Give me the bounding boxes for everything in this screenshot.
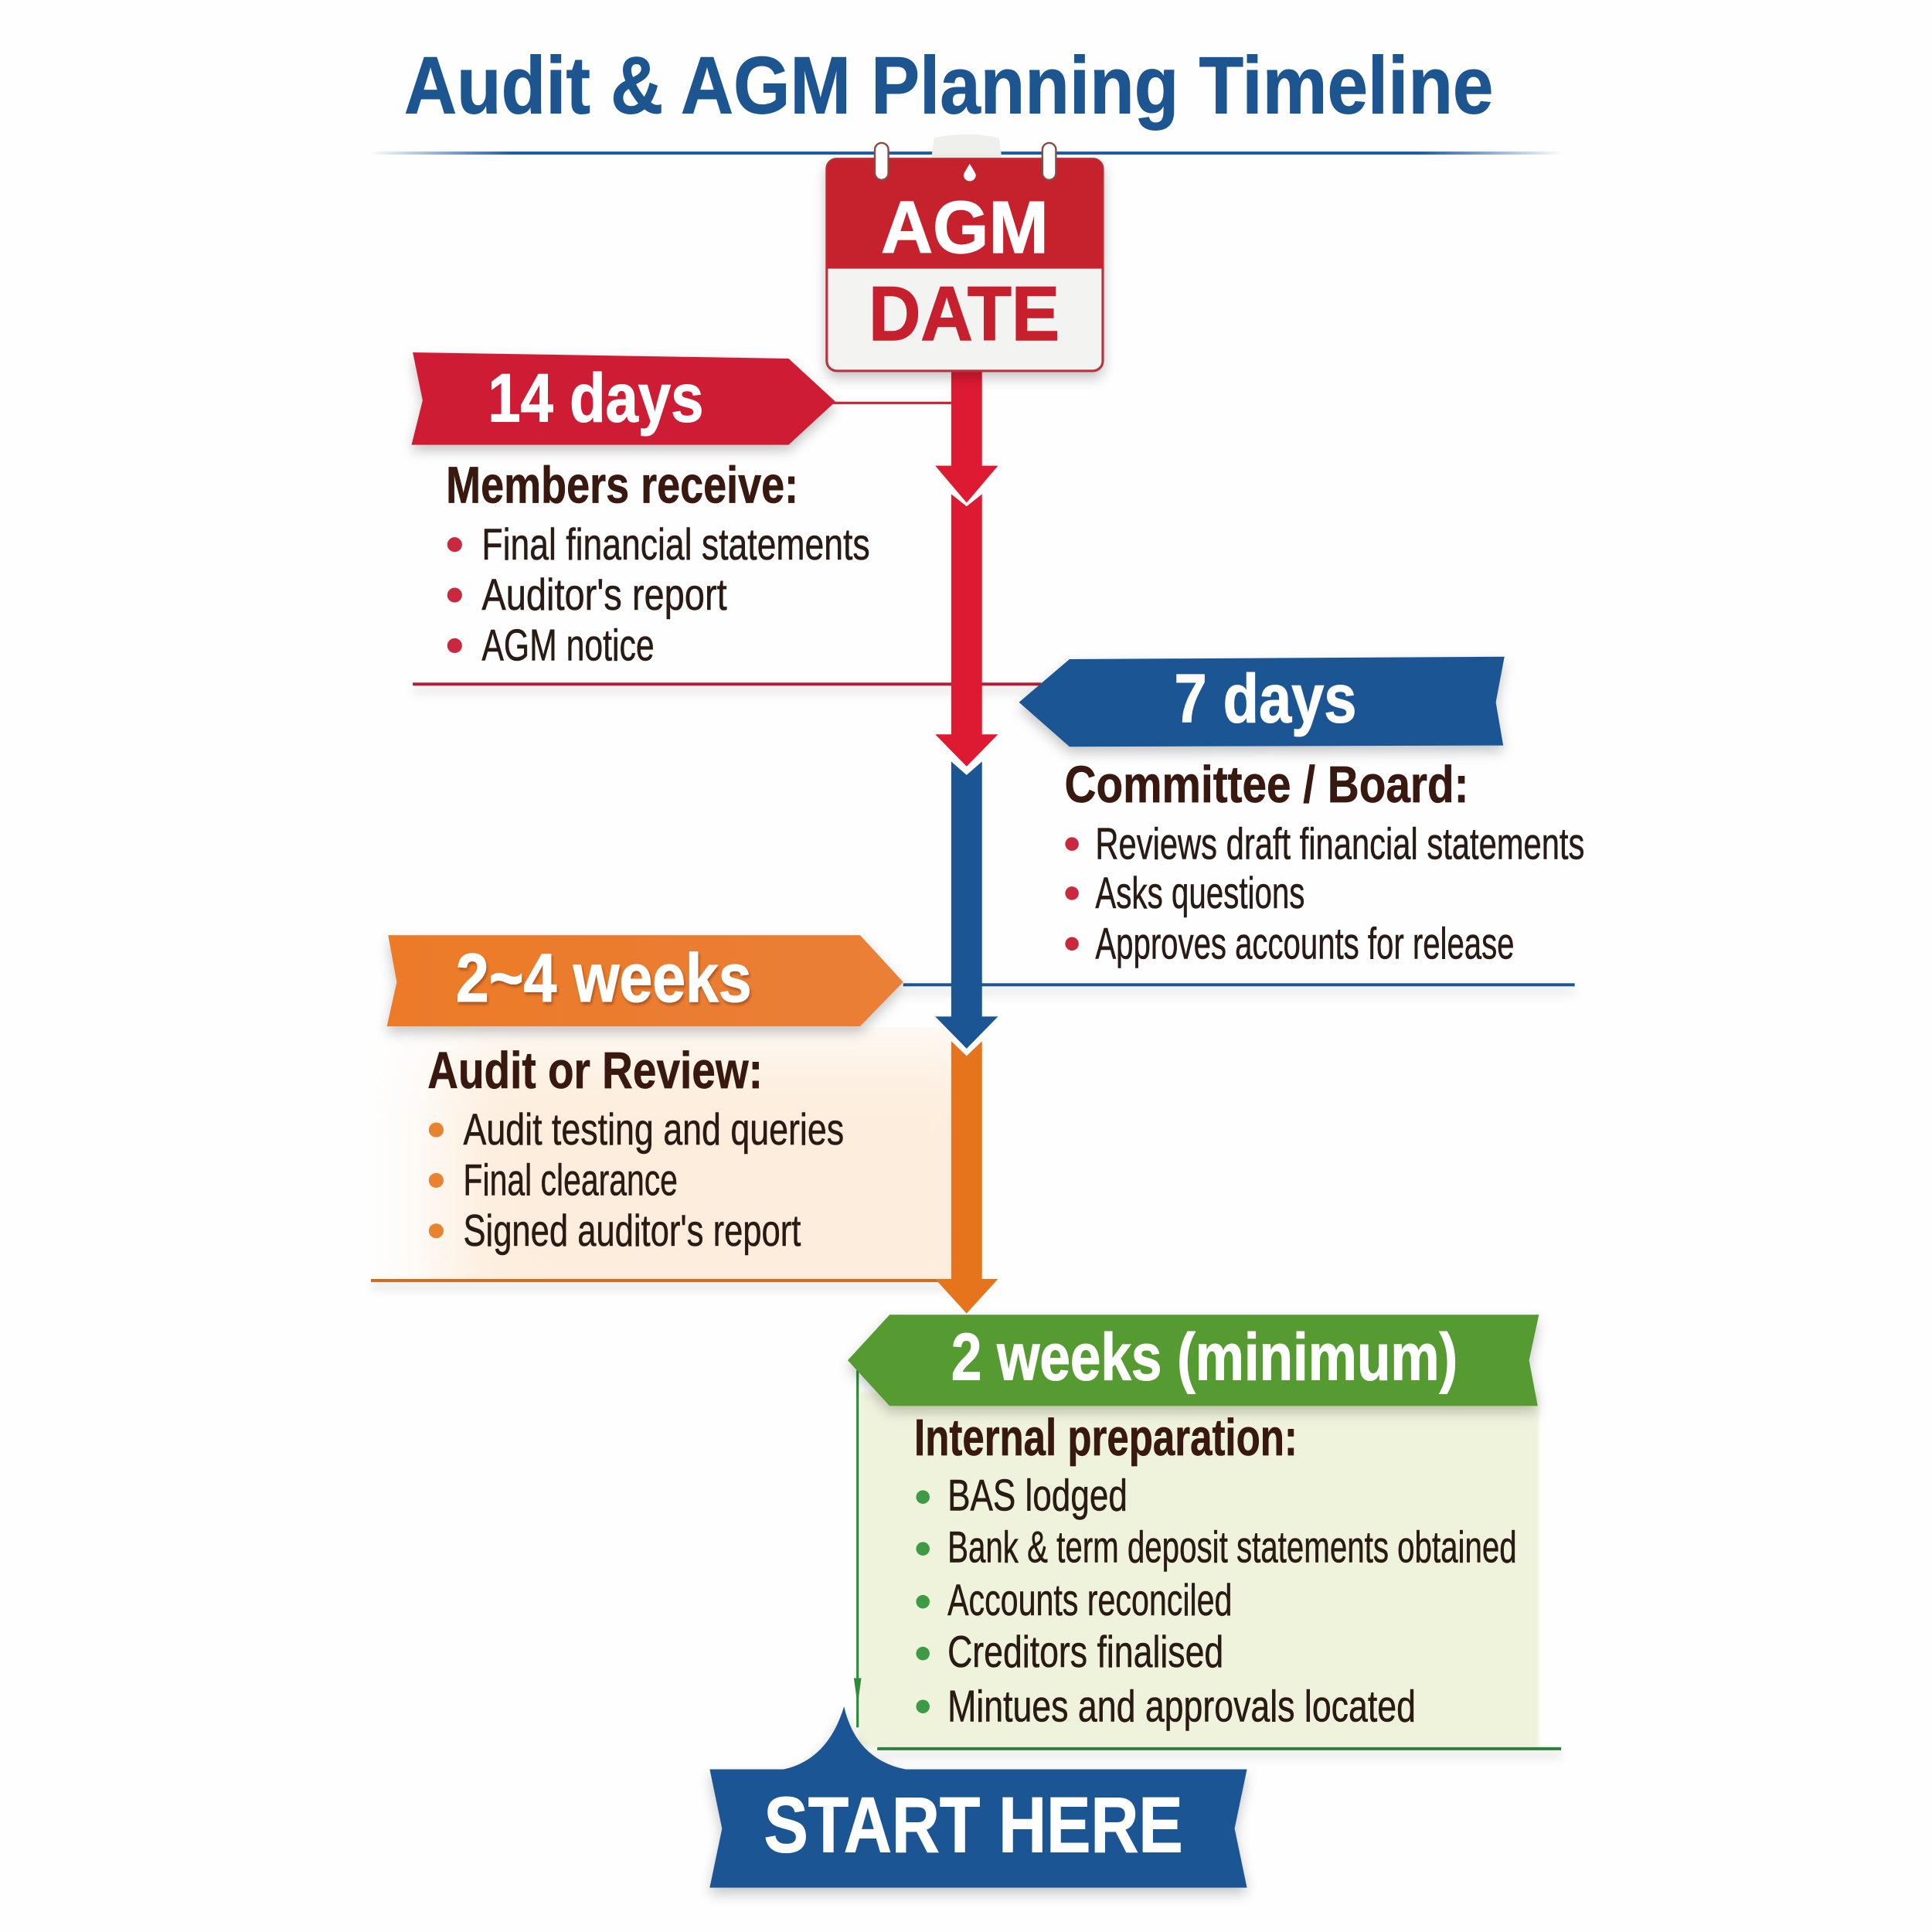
heading: Internal preparation: bbox=[914, 1409, 1298, 1467]
banner shape with peak bbox=[709, 1706, 1247, 1888]
timeline arrow: orange segment bbox=[935, 1041, 998, 1314]
bullet list: Audit testing and queries bbox=[463, 1105, 844, 1155]
banner: 2~4 weeks bbox=[387, 935, 903, 1026]
panel bottom border bbox=[877, 1747, 1561, 1750]
banner: 14 days bbox=[412, 352, 835, 445]
step: 2~4 weeks bbox=[387, 935, 903, 1256]
bullet list: AGM notice bbox=[481, 621, 655, 671]
bullet list: Creditors finalised bbox=[947, 1628, 1223, 1677]
divider: orange bbox=[371, 1279, 951, 1282]
banner label: START HERE bbox=[764, 1781, 1183, 1869]
heading: Audit or Review: bbox=[427, 1042, 763, 1100]
bullet list: BAS lodged bbox=[947, 1471, 1128, 1521]
timeline arrow: red segment 2 bbox=[935, 494, 998, 767]
calendar: AGM date bbox=[827, 134, 1103, 371]
bullet list: Signed auditor's report bbox=[463, 1206, 801, 1256]
bullet list bbox=[429, 1105, 844, 1256]
connector bbox=[833, 402, 951, 404]
calendar pin hole bbox=[964, 164, 976, 181]
bullet list bbox=[1065, 819, 1584, 968]
timeline arrow: blue segment bbox=[935, 761, 998, 1049]
panel: audit or review background bbox=[414, 1028, 954, 1279]
DATE label: DATE bbox=[869, 271, 1060, 356]
step: 7 days bbox=[1019, 657, 1584, 968]
bullet list: Accounts reconciled bbox=[947, 1576, 1232, 1625]
banner label: 7 days bbox=[1174, 659, 1356, 736]
bullet list bbox=[916, 1471, 1517, 1731]
small arrow on border bbox=[854, 1679, 861, 1706]
banner label: 14 days bbox=[488, 359, 703, 436]
bullet list: Reviews draft financial statements bbox=[1095, 819, 1584, 869]
AGM label: AGM bbox=[881, 186, 1049, 269]
bullet list: Final clearance bbox=[463, 1156, 678, 1206]
banner label: 2 weeks (minimum) bbox=[951, 1321, 1458, 1395]
banner label: 2~4 weeks bbox=[456, 939, 752, 1016]
timeline arrow: red segment 1 bbox=[935, 369, 998, 503]
calendar rings bbox=[875, 143, 1056, 180]
bullet list: Bank & term deposit statements obtained bbox=[947, 1523, 1517, 1573]
banner: 7 days bbox=[1019, 657, 1505, 747]
panel: internal preparation bbox=[859, 1393, 1539, 1747]
panel left border bbox=[856, 1370, 859, 1727]
heading: Members receive: bbox=[446, 457, 798, 515]
bullet list: Final financial statements bbox=[481, 520, 870, 570]
bullet list bbox=[447, 520, 870, 671]
banner: 2 weeks minimum bbox=[848, 1315, 1539, 1406]
divider: red bbox=[413, 682, 1041, 685]
calendar hanger tab bbox=[931, 134, 1002, 158]
banner: start here bbox=[709, 1706, 1247, 1888]
heading: Committee / Board: bbox=[1065, 756, 1469, 814]
bullet list: Mintues and approvals located bbox=[947, 1682, 1416, 1731]
bullet list: Asks questions bbox=[1095, 869, 1304, 918]
calendar body bbox=[827, 159, 1103, 371]
divider: blue bbox=[903, 983, 1575, 986]
step: 2 weeks (minimum) bbox=[848, 1315, 1561, 1750]
title: Audit & AGM Planning Timeline bbox=[404, 41, 1493, 131]
step: 14 days bbox=[412, 352, 951, 671]
bullet list: Auditor's report bbox=[481, 570, 727, 620]
bullet list: Approves accounts for release bbox=[1095, 919, 1515, 968]
